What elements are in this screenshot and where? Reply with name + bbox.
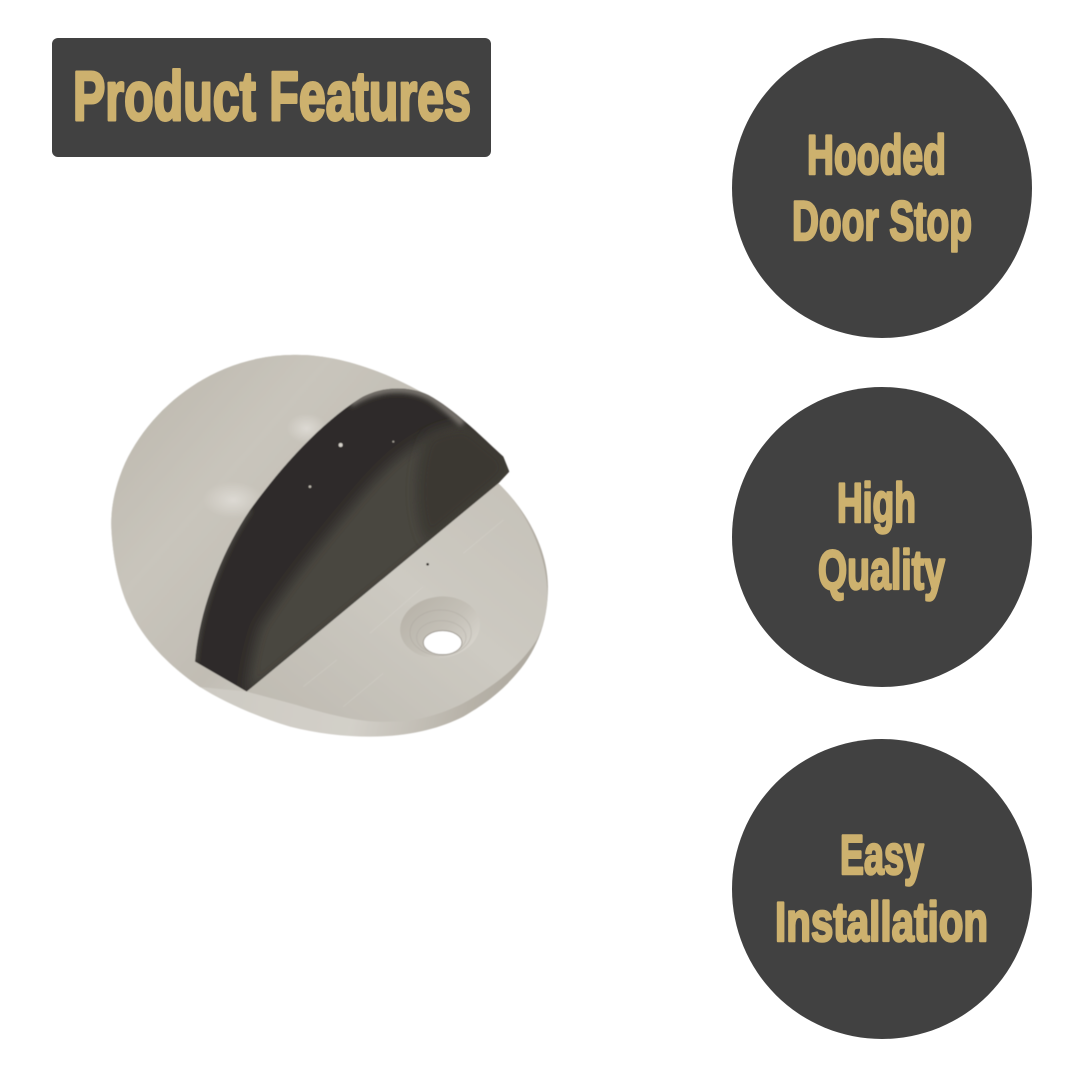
feature: Easy Installation: Easy — [840, 823, 924, 886]
product photo: hooded door stop — [111, 355, 548, 737]
feature: Easy Installation: Installation — [775, 890, 988, 953]
dome highlights — [203, 482, 263, 518]
dome — [111, 355, 427, 692]
feature: Easy Installation — [732, 739, 1032, 1039]
title badge: Product Features — [52, 38, 491, 157]
rubber specks — [309, 441, 429, 566]
feature: High Quality: High — [837, 471, 916, 534]
plate surface — [247, 483, 547, 722]
feature: High Quality — [732, 387, 1032, 687]
feature: High Quality: Quality — [818, 538, 945, 601]
screw hole — [396, 591, 484, 663]
feature: Hooded Door Stop: Door Stop — [792, 189, 972, 252]
feature: Hooded Door Stop — [732, 38, 1032, 338]
base rim silhouette — [111, 355, 548, 737]
rubber bumper — [195, 388, 517, 697]
title badge: Product Features: Product Features — [73, 57, 471, 135]
feature: Hooded Door Stop: Hooded — [807, 123, 946, 186]
brushed lines — [303, 520, 503, 707]
